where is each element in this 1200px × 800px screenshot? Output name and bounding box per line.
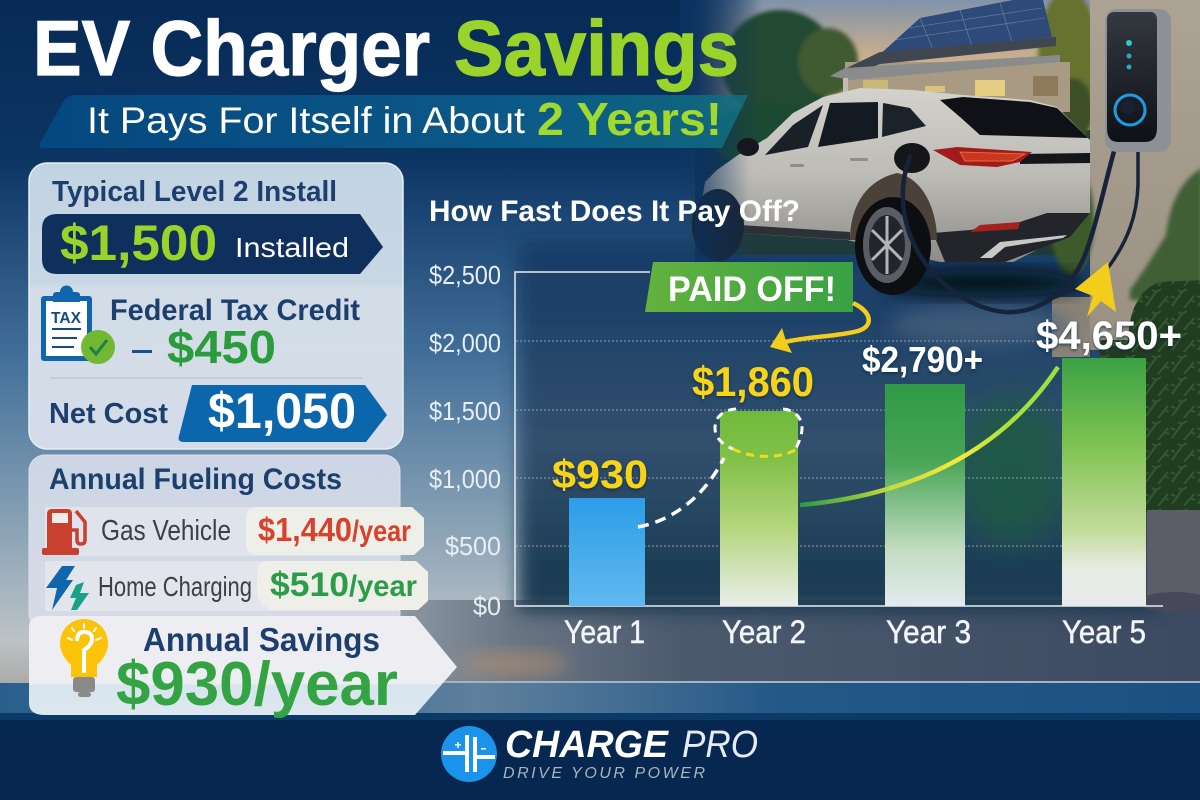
wall charger [1105, 9, 1171, 152]
panel: annual savings: Annual Savings [143, 621, 380, 658]
chart title: How Fast Does It Pay Off? [429, 195, 800, 228]
callout: paid off: PAID OFF! [668, 270, 836, 309]
subtitle ribbon [39, 93, 748, 148]
value label: $930: $930 [552, 453, 648, 497]
logo text: CHARGE [505, 724, 670, 766]
icon: tax clipboard: TAX [51, 310, 81, 327]
row: gas vehicle: Gas Vehicle [101, 515, 231, 547]
title [33, 4, 739, 92]
value pill: home: $510 [270, 566, 349, 604]
row: home charging [46, 561, 428, 610]
icon: tax clipboard [41, 286, 115, 364]
heading: typical install: Typical Level 2 Install [52, 176, 337, 208]
footer strip background [0, 681, 1200, 720]
footer [0, 720, 1200, 800]
subtitle ribbon: It Pays For Itself in About [87, 100, 526, 141]
x-axis labels: Year 5 [1062, 614, 1146, 650]
dashed highlight around bar 2 top [715, 409, 802, 456]
price tag: $1,500 installed: $1,500 [60, 215, 217, 271]
row: home charging: Home Charging [98, 571, 252, 602]
value pill: gas: /year [352, 515, 411, 548]
value label: $2,790+: $2,790+ [862, 339, 983, 380]
bar: year 3 [885, 384, 965, 606]
growth curve [800, 367, 1058, 505]
y-axis labels: $1,500 [429, 396, 501, 426]
subtitle ribbon: 2 Years! [537, 93, 722, 145]
title: EV Charger [33, 4, 430, 92]
right side bushes and planter [1100, 168, 1200, 612]
logo text [505, 724, 758, 766]
row: gas vehicle [42, 507, 424, 555]
value pill: gas: $1,440 [258, 511, 352, 548]
house with solar panels [830, 0, 1070, 112]
x-axis labels [564, 614, 1146, 650]
y-axis labels [429, 260, 501, 621]
price tag: $1,500 installed [42, 214, 383, 274]
label: net cost: Net Cost [49, 398, 168, 430]
callout: paid off [645, 262, 853, 312]
title: Savings [454, 4, 739, 92]
bar: year 2 [720, 411, 798, 606]
bush behind car [1050, 165, 1094, 275]
dashed growth arrow from year 1 to year 2 [638, 458, 724, 527]
arrow: to wall charger [1075, 262, 1116, 317]
icon: gas pump [42, 509, 85, 555]
charging cable [903, 107, 1138, 312]
panel: install cost [29, 163, 403, 449]
panel: annual savings: $930/year [116, 650, 398, 719]
icon: lightning bolts [46, 566, 89, 610]
y-axis labels: $0 [473, 591, 501, 621]
low wall stub [1052, 297, 1090, 357]
chart backdrop [518, 240, 1158, 612]
y-axis labels: $2,000 [429, 328, 501, 358]
x-axis labels: Year 2 [722, 614, 806, 650]
value pill: gas [246, 507, 424, 555]
value pill: home: /year [349, 570, 417, 603]
bar: year 1 [569, 498, 645, 606]
badge: net cost $1,050 [179, 383, 387, 442]
background trees [708, 0, 1098, 167]
y-axis labels: $2,500 [429, 260, 501, 290]
bar: year 5 [1062, 358, 1146, 606]
arrow: paid off to year 2 [770, 303, 869, 353]
y-axis labels: $500 [445, 531, 501, 561]
sky [696, 0, 1090, 130]
x-axis labels: Year 3 [886, 614, 971, 650]
wall [1090, 0, 1200, 350]
bar chart [429, 260, 1182, 650]
price tag: $1,500 installed: Installed [235, 232, 349, 263]
value: minus $450: $450 [167, 321, 276, 373]
driveway shading [890, 305, 1070, 345]
value label: $4,650+: $4,650+ [1036, 314, 1182, 358]
panel: annual fueling costs [29, 455, 428, 630]
tagline: DRIVE YOUR POWER [503, 765, 705, 782]
car [692, 88, 1090, 295]
heading: fueling costs: Annual Fueling Costs [49, 463, 342, 496]
logo icon [441, 726, 497, 782]
badge: net cost $1,050: $1,050 [208, 383, 356, 439]
fade of scene into navy [680, 0, 760, 150]
green haze below chart curve [957, 395, 1067, 545]
value label: $1,860: $1,860 [692, 358, 814, 405]
label: federal tax credit: Federal Tax Credit [110, 294, 360, 327]
logo text: PRO [682, 724, 758, 766]
grid lines and axes [515, 272, 1163, 606]
value pill: home [257, 561, 428, 610]
icon: light bulb [60, 619, 108, 697]
panel: annual savings [29, 616, 457, 719]
x-axis labels: Year 1 [564, 614, 645, 650]
y-axis labels: $1,000 [429, 464, 501, 494]
